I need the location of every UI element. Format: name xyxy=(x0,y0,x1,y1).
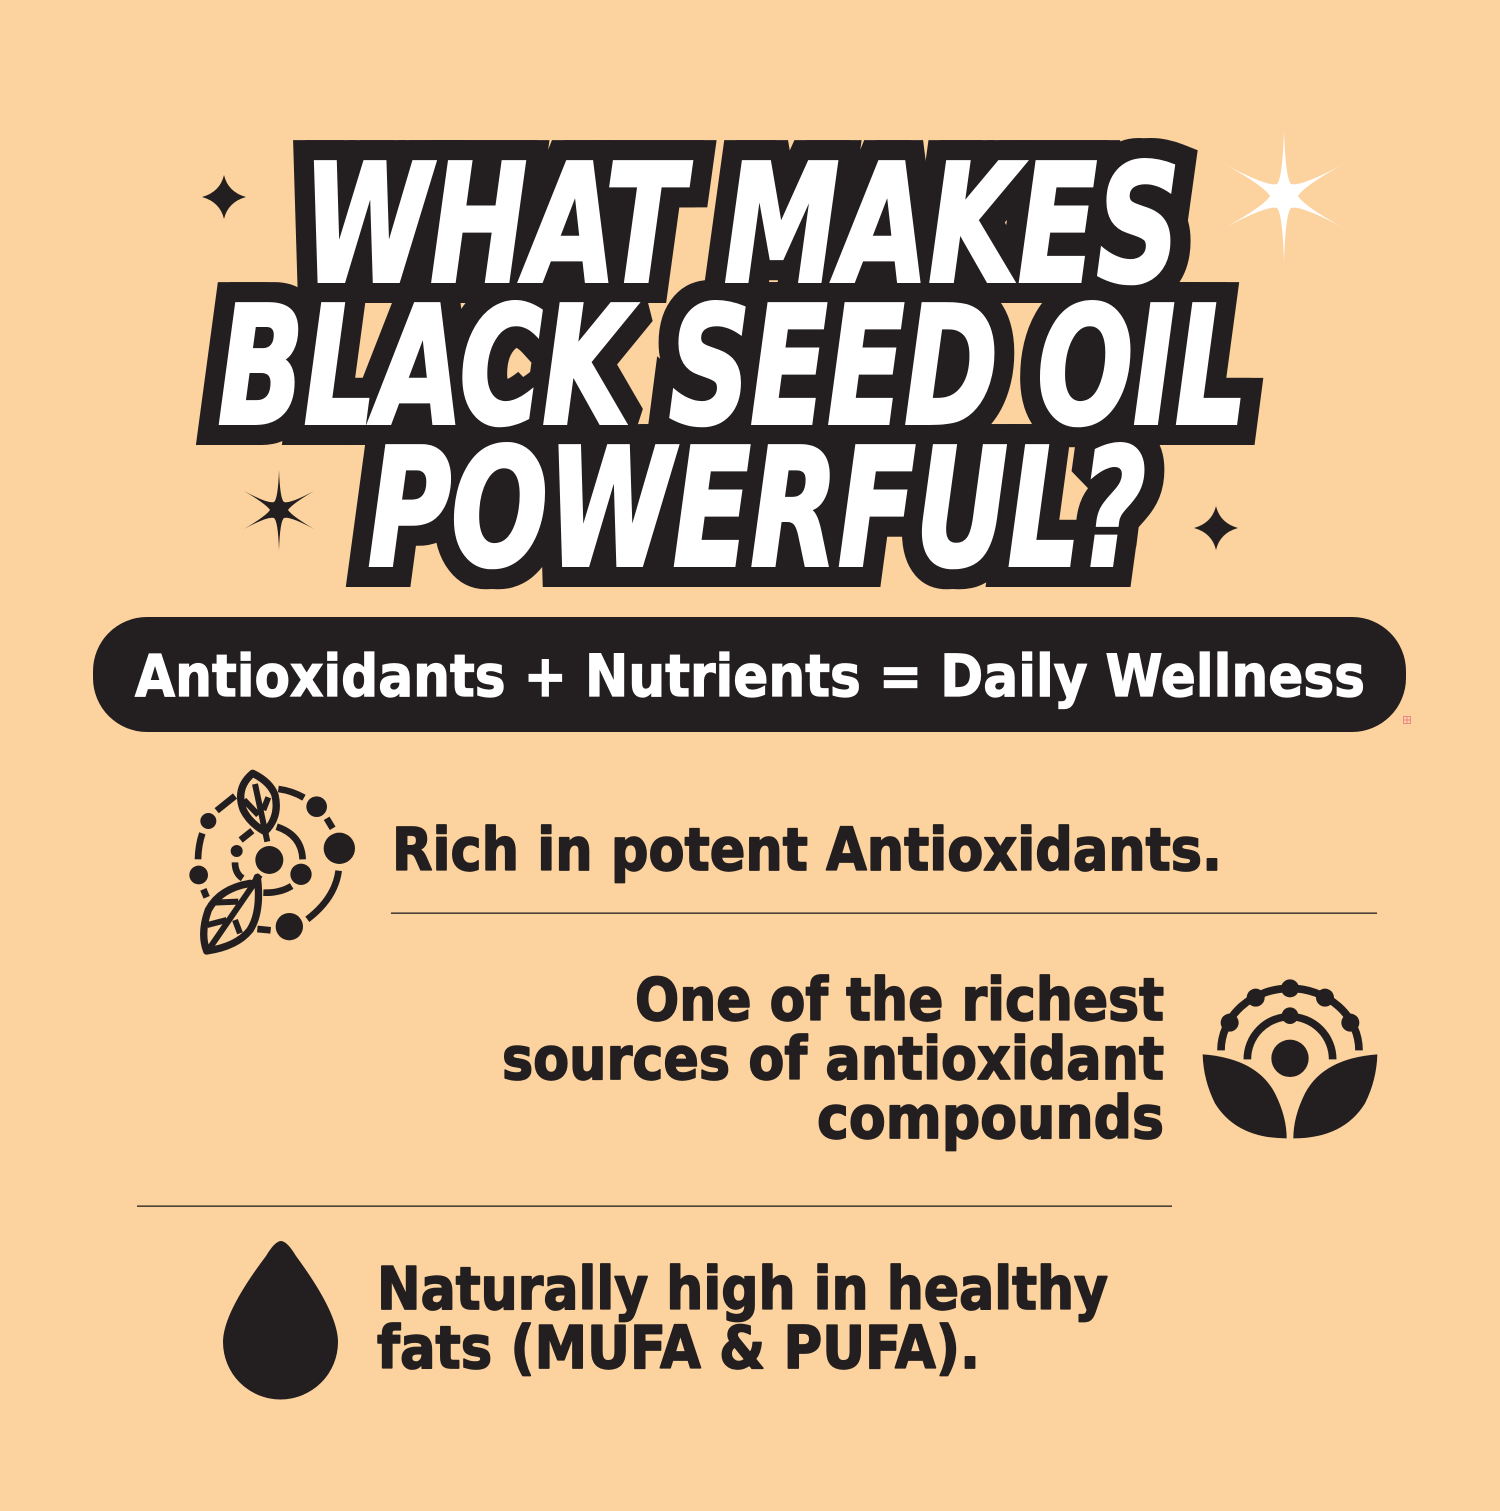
icon: oil drop xyxy=(223,1241,338,1399)
subtitle pill: Antioxidants + Nutrients = Daily Wellness xyxy=(135,642,1365,710)
icon: four-point star bottom right xyxy=(1194,506,1238,550)
text: healthy fats: fats (MUFA & PUFA). xyxy=(377,1313,980,1382)
text: healthy fats xyxy=(377,1254,1108,1382)
icon: plant with orbit xyxy=(1203,979,1377,1138)
title: POWERFUL? xyxy=(362,415,1140,604)
subtitle pill xyxy=(93,617,1406,732)
text: richest sources: One of the richest xyxy=(635,965,1164,1034)
text: healthy fats: Naturally high in healthy xyxy=(377,1254,1108,1323)
text: rich in antioxidants: Rich in potent Antioxidants. xyxy=(392,815,1222,884)
title xyxy=(212,131,1253,604)
title: POWERFUL? xyxy=(374,415,1152,604)
title: POWERFUL? xyxy=(368,415,1146,604)
icon: antioxidants molecule with leaves xyxy=(189,773,355,951)
text: richest sources: sources of antioxidant xyxy=(502,1024,1164,1093)
icon: six-ray dark sparkle xyxy=(244,470,314,550)
small artifact marker xyxy=(1404,716,1410,724)
text: richest sources: compounds xyxy=(817,1083,1164,1152)
title: WHAT MAKES xyxy=(297,131,1174,320)
icon: six-ray white sparkle xyxy=(1226,130,1342,262)
icon: four-point star top left xyxy=(202,175,246,219)
text: richest sources xyxy=(502,965,1164,1152)
